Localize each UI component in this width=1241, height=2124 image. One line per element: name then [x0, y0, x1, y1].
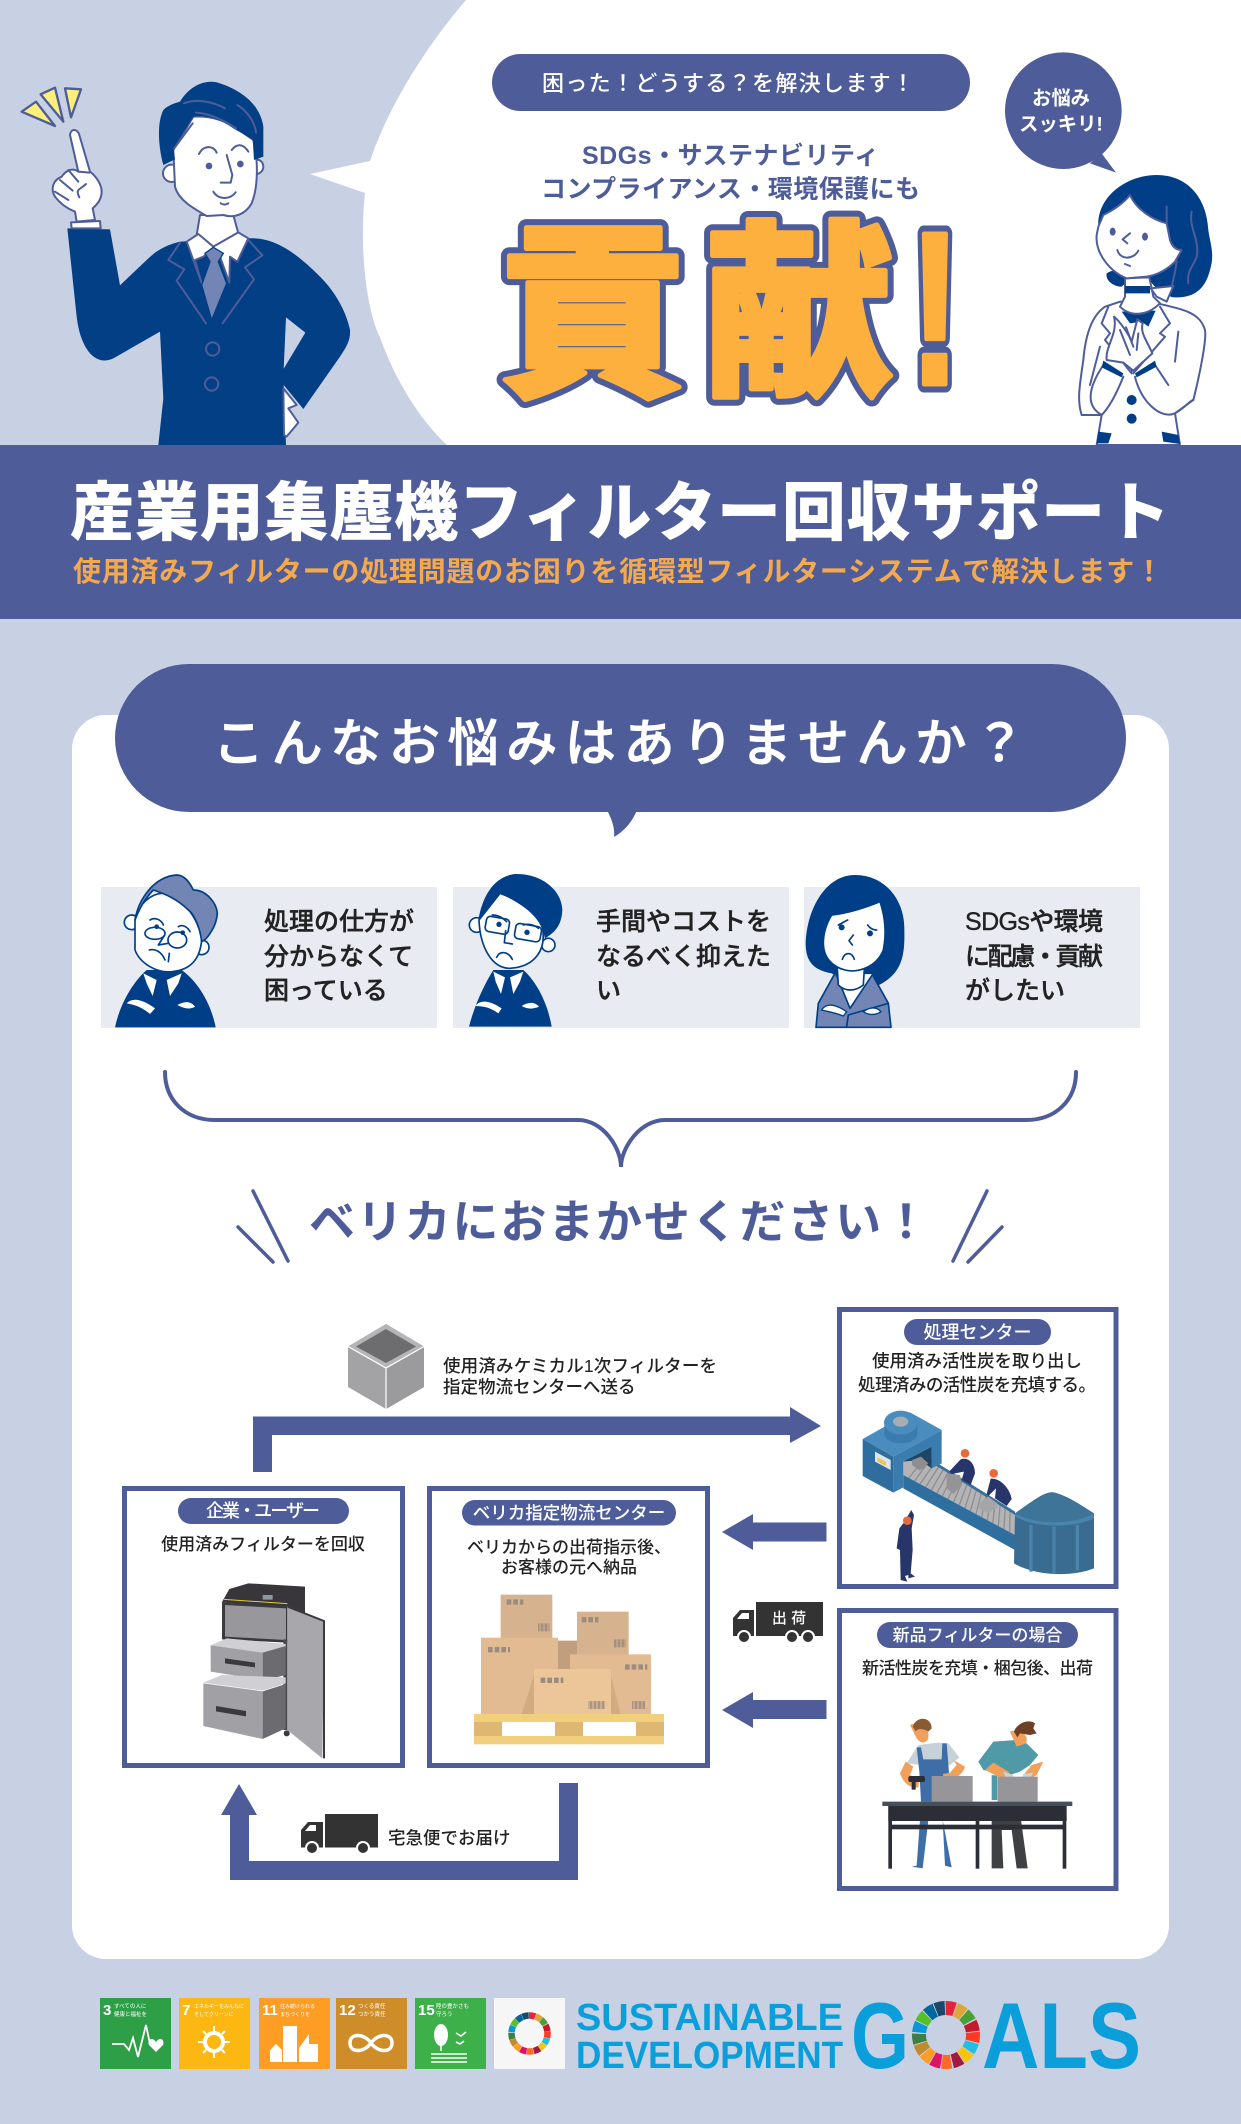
panel: worry 1: 分からなくて	[264, 943, 413, 971]
panel: Verica logistics center	[430, 1488, 708, 1766]
illustration: filter cabinet	[203, 1583, 664, 1758]
large heading: contribution: 献	[704, 210, 892, 420]
illustration: woman with speech bubble: スッキリ!	[1019, 115, 1103, 136]
panel: worry 3	[804, 875, 1140, 1028]
icon: goal 11: 住み続けられる	[280, 2003, 315, 2010]
panel: worry 2: 手間やコストを	[596, 908, 771, 936]
icon: goal 15: 守ろう	[436, 2011, 453, 2018]
illustration: woman with speech bubble	[1005, 52, 1212, 445]
arrow: logistics to user	[221, 1783, 578, 1880]
panel: worry 2	[453, 874, 789, 1028]
arrow: new filter to logistics	[722, 1692, 826, 1728]
panel: processing center: 処理済みの活性炭を充填する。	[858, 1375, 1096, 1395]
SDG goal icons	[100, 1998, 565, 2069]
icon: goal 11: まちづくりを	[280, 2011, 310, 2018]
large heading: contribution: 貢	[498, 211, 686, 421]
top pill: problem statement: 困った！どうする？を解決します！	[542, 71, 914, 96]
subheading: SDGs and sustainability: コンプライアンス・環境保護にも	[541, 176, 920, 204]
caption: send filter to logistics center: 使用済みケミカル1次フィルターを	[443, 1356, 717, 1376]
icon: goal 12: つかう責任	[358, 2010, 386, 2018]
icon: goal 7	[179, 1998, 250, 2069]
hero speech bubble background	[310, 0, 1241, 445]
Sustainable Development Goals logo: G	[851, 1983, 909, 2088]
icon: goal 7: エネルギーをみんなに	[194, 2003, 244, 2010]
panel: new filter case: 新活性炭を充填・梱包後、出荷	[862, 1659, 1093, 1678]
large heading: contribution: 貢	[498, 211, 686, 421]
panel: processing center: 使用済み活性炭を取り出し	[872, 1351, 1082, 1371]
panel: Verica logistics center: ベリカ指定物流センター	[473, 1503, 665, 1523]
panel: worry 3: SDGsや環境	[965, 908, 1103, 936]
icon: shipping truck: 出 荷	[772, 1610, 806, 1627]
icon: goal 12	[336, 1998, 407, 2069]
arrow: processing center to logistics	[722, 1514, 826, 1550]
panel: worry 2: なるべく抑えた	[596, 943, 771, 971]
panel: company / user	[124, 1488, 664, 1766]
icon: goal 15: 陸の豊かさも	[436, 2002, 469, 2010]
panel: worry 3: に配慮・貢献	[965, 943, 1103, 971]
illustration: businessman pointing up	[22, 82, 350, 445]
Sustainable Development Goals logo: DEVELOPMENT	[576, 2035, 843, 2077]
top pill: problem statement	[492, 54, 970, 111]
panel: company / user: 使用済みフィルターを回収	[161, 1535, 365, 1554]
illustration: conveyor line	[863, 1411, 1094, 1582]
main white card	[72, 715, 1169, 1959]
speech bubble heading: any troubles	[115, 664, 1126, 837]
icon: goal 15: 15	[418, 2002, 435, 2019]
title band	[0, 445, 1241, 619]
icon: goal 11	[259, 1998, 330, 2069]
Sustainable Development Goals logo	[576, 1983, 1141, 2088]
icon: goal 3	[100, 1998, 171, 2069]
panel: company / user: 企業・ユーザー	[206, 1501, 320, 1521]
panel: worry 1: 処理の仕方が	[264, 908, 414, 936]
speech bubble heading: any troubles: こんなお悩みはありませんか？	[213, 715, 1025, 772]
icon: goal 3: すべての人に	[114, 2003, 146, 2010]
title band: 産業用集塵機フィルター回収サポート	[70, 477, 1170, 549]
large heading: contribution: !	[909, 188, 961, 431]
panel: processing center: 処理センター	[924, 1322, 1032, 1342]
icon: goal 12: 12	[339, 2002, 356, 2019]
title band: 使用済みフィルターの処理問題のお困りを循環型フィルターシステムで解決します！	[73, 556, 1163, 587]
illustration: two workers at bench	[882, 1719, 1072, 1869]
large heading: contribution: !	[909, 188, 961, 431]
large heading: contribution: 献	[704, 210, 892, 420]
panel: new filter case	[840, 1610, 1116, 1888]
panel: Verica logistics center: ベリカからの出荷指示後、	[467, 1538, 671, 1557]
panel: worry 1	[101, 875, 437, 1028]
icon: delivery truck	[301, 1814, 378, 1854]
panel: worry 3: がしたい	[965, 977, 1065, 1005]
panel: worry 2: い	[596, 977, 621, 1005]
subheading: SDGs and sustainability: SDGs・サステナビリティ	[582, 142, 879, 170]
panel: worry 1: 困っている	[264, 977, 388, 1005]
icon: goal 15	[415, 1998, 486, 2069]
caption: home delivery: 宅急便でお届け	[388, 1828, 510, 1848]
panel: processing center	[840, 1310, 1116, 1586]
icon: SDGs wheel	[494, 1998, 565, 2069]
curly brace	[165, 1072, 1076, 1167]
panel: new filter case: 新品フィルターの場合	[893, 1626, 1062, 1645]
icon: goal 11: 11	[262, 2002, 278, 2019]
icon: goal 3: 健康と福祉を	[114, 2010, 147, 2018]
Sustainable Development Goals logo: ALS	[982, 1983, 1141, 2088]
icon: goal 12: つくる責任	[358, 2002, 386, 2010]
icon: goal 7: そしてクリーンに	[194, 2011, 234, 2018]
arrow: user to processing center	[253, 1407, 821, 1472]
heading: leave it to Verica	[238, 1191, 1002, 1262]
heading: leave it to Verica: ベリカにおまかせください！	[309, 1196, 929, 1248]
Sustainable Development Goals logo: SUSTAINABLE	[576, 1997, 843, 2039]
caption: send filter to logistics center: 指定物流センターへ送る	[443, 1377, 636, 1397]
icon: shipping truck	[733, 1602, 823, 1643]
panel: Verica logistics center: お客様の元へ納品	[501, 1558, 637, 1577]
icon: goal 7: 7	[182, 2002, 190, 2019]
icon: goal 3: 3	[103, 2002, 111, 2019]
large heading: contribution	[498, 188, 961, 431]
subheading: SDGs and sustainability	[541, 142, 920, 204]
illustration: cardboard boxes on pallet	[474, 1595, 664, 1744]
illustration: woman with speech bubble: お悩み	[1032, 88, 1090, 110]
icon: used filter cube	[348, 1324, 424, 1409]
